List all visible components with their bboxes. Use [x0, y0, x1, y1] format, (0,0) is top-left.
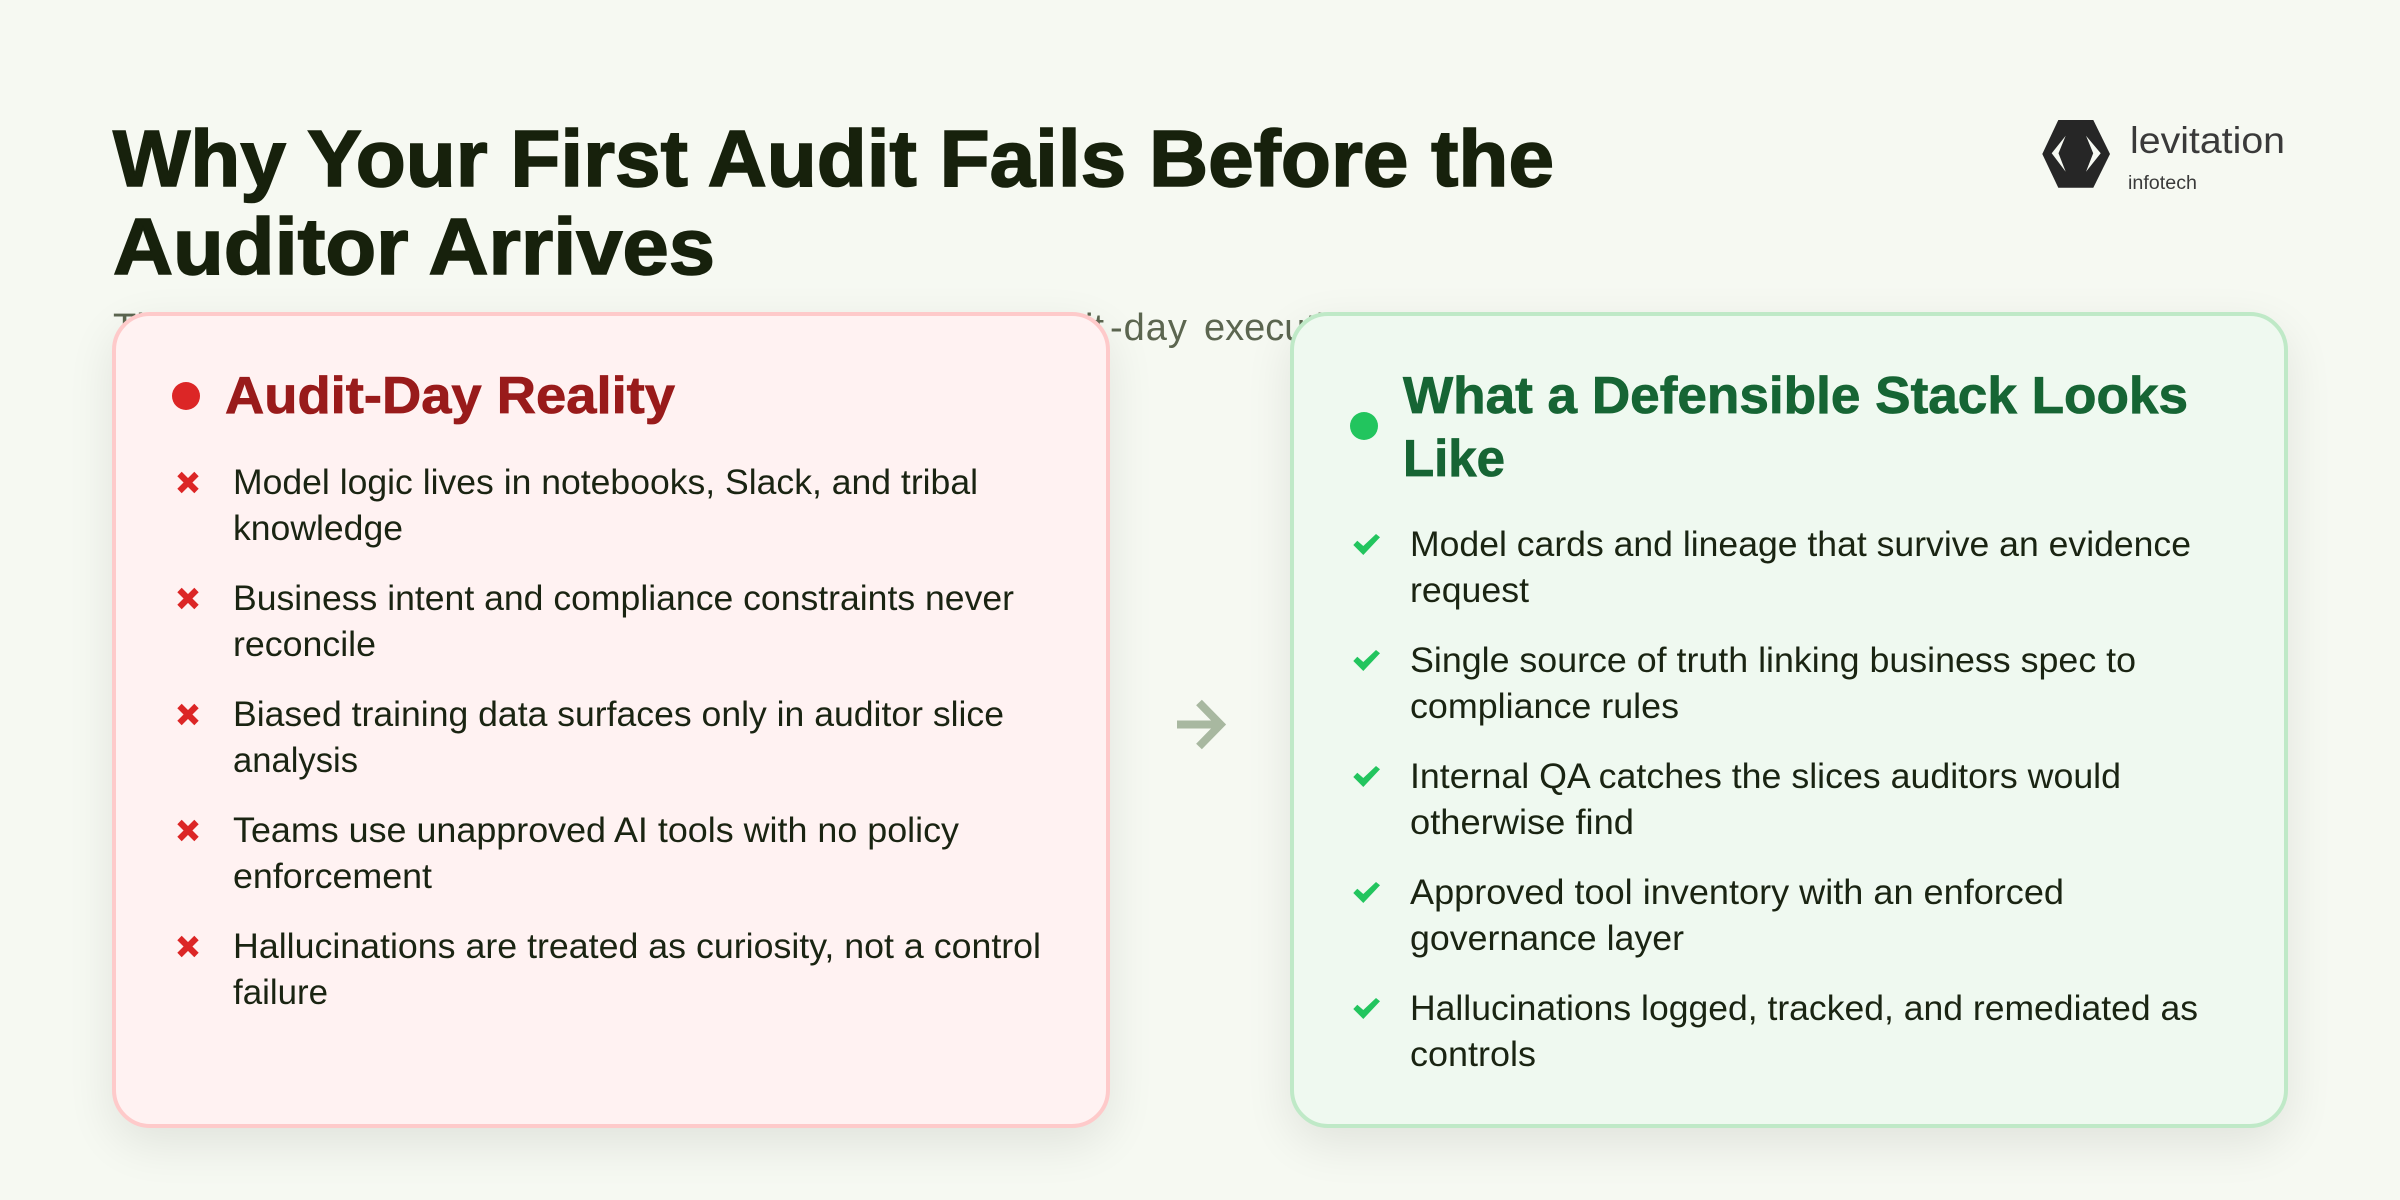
logo wordmark: levitation — [2130, 120, 2285, 161]
subtitle: execution — [1204, 307, 1367, 349]
item: hallucinations logged — [1353, 989, 2198, 1074]
item: model logic — [180, 463, 978, 548]
item: unapproved tools: Teams use unapproved AI tools with no policy — [233, 811, 960, 850]
item: internal QA: otherwise find — [1410, 803, 1634, 842]
item: hallucinations logged: controls — [1410, 1035, 1536, 1074]
logo wordmark — [2128, 120, 2285, 194]
panel heading: defensible stack — [1350, 367, 2188, 488]
item: business intent: Business intent and compliance constraints never — [233, 579, 1014, 618]
item: hallucinations logged: Hallucinations logged, tracked, and remediated as — [1410, 989, 2198, 1028]
item: approved tool inventory: governance layer — [1410, 919, 1684, 958]
panel heading: defensible stack: What a Defensible Stack Looks — [1403, 367, 2188, 425]
item: biased training data: Biased training data surfaces only in auditor slice — [233, 695, 1004, 734]
item: model logic: knowledge — [233, 509, 403, 548]
panel heading: defensible stack: Like — [1403, 430, 1505, 488]
item: unapproved tools — [180, 811, 960, 896]
subtitle: The real failure is the distance between policy and aud — [113, 307, 1030, 349]
item: hallucinations as curiosity — [180, 927, 1041, 1012]
title: Why Your First Audit Fails Before the — [113, 114, 1554, 203]
item: model logic: Model logic lives in notebooks, Slack, and tribal — [233, 463, 978, 502]
item: internal QA: Internal QA catches the slices auditors would — [1410, 757, 2121, 796]
item: model cards — [1353, 525, 2191, 610]
item: unapproved tools: enforcement — [233, 857, 432, 896]
icon: hexagon logo mark — [2042, 120, 2110, 188]
item: single source of truth: Single source of truth linking business spec to — [1410, 641, 2136, 680]
arrow — [1177, 700, 1226, 750]
item: biased training data — [180, 695, 1004, 780]
item: model cards: Model cards and lineage that survive an evidence — [1410, 525, 2191, 564]
item: single source of truth — [1353, 641, 2136, 726]
item: single source of truth: compliance rules — [1410, 687, 1679, 726]
item: biased training data: analysis — [233, 741, 358, 780]
item: approved tool inventory — [1353, 873, 2064, 958]
item: hallucinations as curiosity: Hallucinations are treated as curiosity, not a control — [233, 927, 1041, 966]
logo wordmark: infotech — [2128, 173, 2197, 194]
panel: defensible stack — [1290, 312, 2288, 1128]
subtitle: it — [1085, 307, 1104, 349]
title: Auditor Arrives — [113, 202, 715, 291]
title — [112, 114, 1554, 291]
panel: audit-day reality — [112, 312, 1110, 1128]
item: hallucinations as curiosity: failure — [233, 973, 328, 1012]
subtitle: -day — [1110, 307, 1199, 349]
logo — [2042, 120, 2285, 194]
item: business intent — [180, 579, 1014, 664]
item: model cards: request — [1410, 571, 1529, 610]
item: internal QA — [1353, 757, 2121, 842]
item: approved tool inventory: Approved tool inventory with an enforced — [1410, 873, 2064, 912]
panel heading: audit-day reality: Audit-Day Reality — [225, 367, 675, 425]
item: business intent: reconcile — [233, 625, 376, 664]
